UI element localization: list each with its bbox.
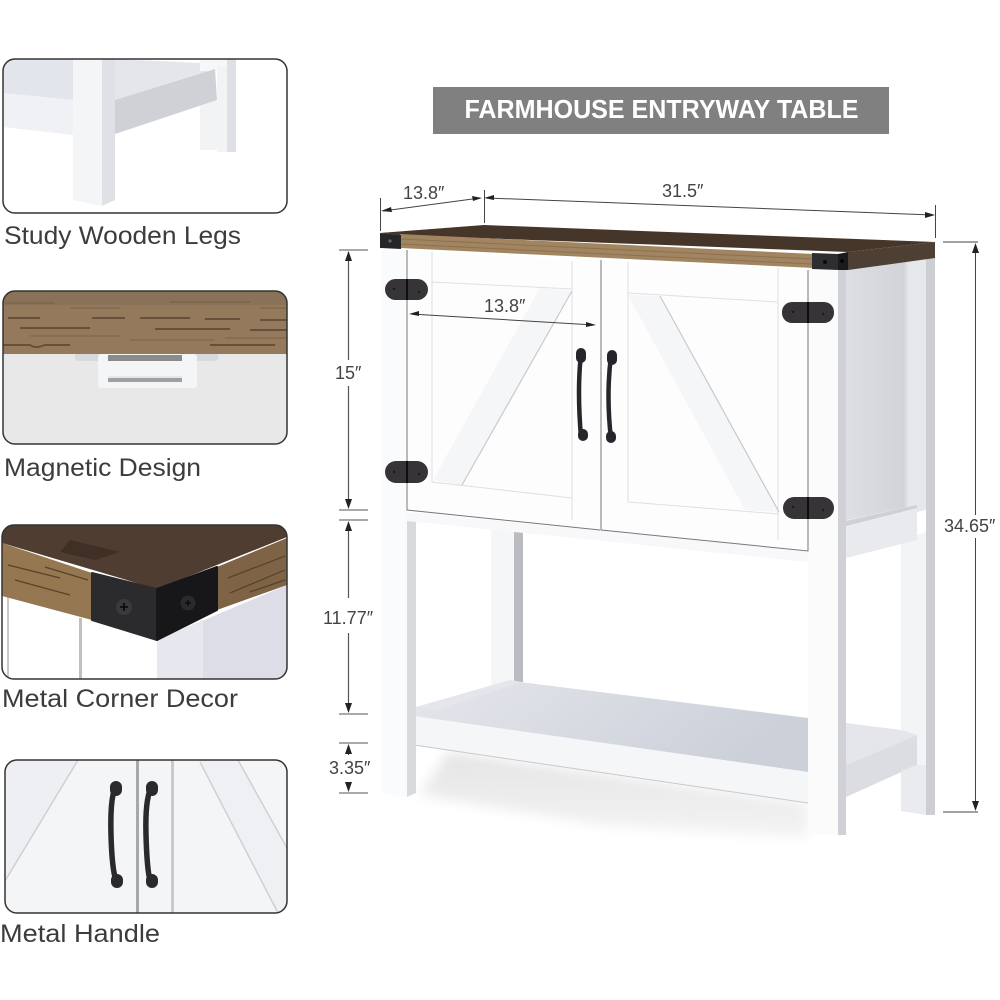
dimension labels [323, 181, 996, 778]
side panel [838, 258, 926, 530]
corner brackets [380, 233, 401, 249]
back right leg [901, 532, 926, 815]
hinges [385, 279, 834, 519]
handles [579, 353, 612, 439]
left door [407, 251, 600, 530]
handle pair [111, 787, 152, 882]
dimension labels: 13.8″ [403, 183, 445, 203]
back left leg [491, 530, 523, 685]
title banner: FARMHOUSE ENTRYWAY TABLE [464, 94, 858, 124]
right door [600, 261, 808, 551]
product: farmhouse entryway table [380, 225, 935, 838]
caption: metal corner decor: Metal Corner Decor [2, 685, 238, 713]
panel: magnetic design [3, 291, 287, 444]
panel: metal handle [5, 760, 287, 913]
panel: study wooden legs [3, 59, 287, 213]
title banner [433, 87, 889, 134]
table top [380, 225, 935, 270]
dimension arrowheads [345, 195, 979, 811]
door outlines [407, 250, 808, 551]
caption: metal handle: Metal Handle [0, 920, 160, 948]
panel: metal corner decor [2, 525, 287, 679]
dimension labels: 3.35″ [329, 758, 371, 778]
front right leg [808, 268, 846, 835]
dimension labels: 15″ [335, 363, 362, 383]
floor shadow [420, 752, 808, 838]
dimension labels: 13.8″ [484, 296, 526, 316]
front left leg [382, 250, 416, 797]
side rail [846, 505, 917, 558]
bottom shelf [414, 680, 926, 815]
dimension lines [339, 190, 978, 812]
dimension labels: 11.77″ [323, 608, 374, 628]
caption: magnetic design: Magnetic Design [4, 454, 201, 482]
dimension labels: 31.5″ [662, 181, 704, 201]
dimension labels: 34.65″ [944, 516, 996, 536]
cabinet rail [407, 512, 808, 562]
caption: study wooden legs: Study Wooden Legs [4, 222, 241, 250]
